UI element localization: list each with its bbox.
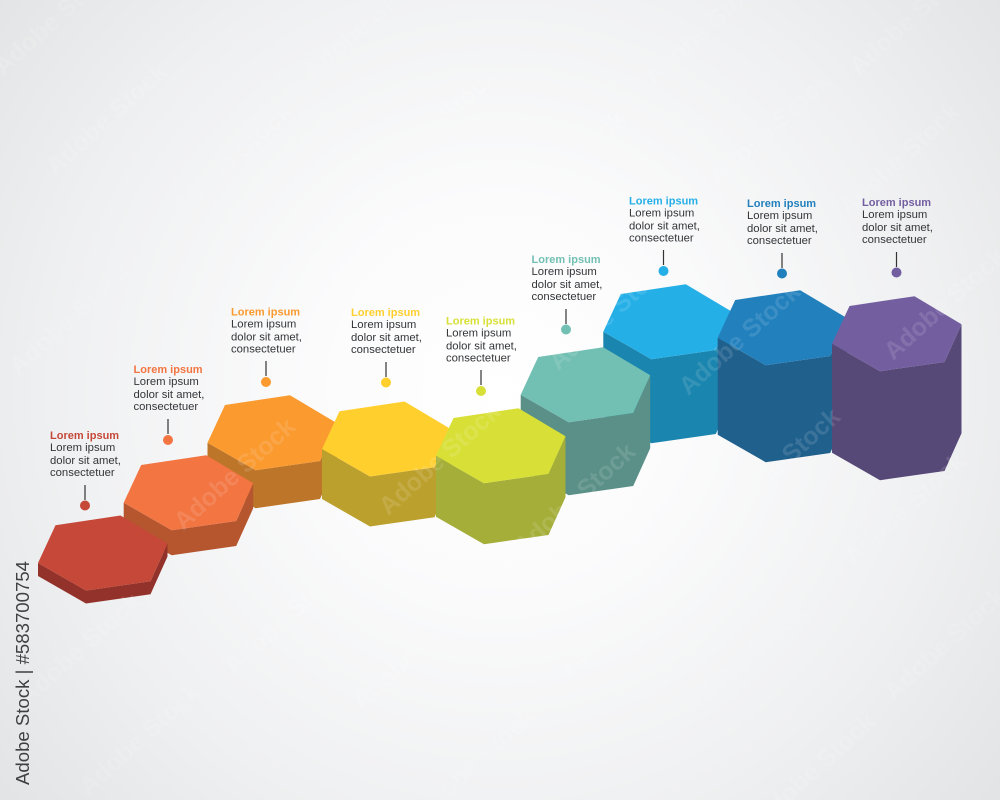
step 6: teal hexagon (521, 347, 650, 495)
label 3: dolor sit amet, (231, 332, 302, 344)
label 1 (50, 430, 121, 510)
label 2: Lorem ipsum (134, 364, 203, 376)
watermark pattern: Adobe Stock (14, 587, 146, 711)
label 4: dolor sit amet, (351, 332, 422, 344)
watermark pattern: Adobe Stock (169, 412, 301, 536)
step 8: dark blue hexagon (718, 290, 847, 462)
watermark pattern: Adobe Stock (41, 57, 173, 181)
step 9: purple hexagon (832, 296, 962, 480)
label 7: Lorem ipsum (629, 196, 698, 208)
label 6: Lorem ipsum (532, 254, 601, 266)
label 3 (231, 306, 302, 387)
label 7 (629, 196, 700, 276)
watermark pattern: Adobe Stock (509, 437, 641, 561)
step 3: amber hexagon (208, 395, 337, 508)
label 8: Lorem ipsum (747, 210, 812, 222)
label 2: consectetuer (134, 401, 198, 413)
label 5: Lorem ipsum (446, 316, 515, 328)
step 7: light blue hexagon (603, 284, 733, 443)
watermark pattern: Adobe Stock (839, 447, 971, 571)
watermark pattern: Adobe Stock (339, 262, 471, 386)
label 8 (747, 198, 818, 278)
label 8: Lorem ipsum (747, 198, 816, 210)
watermark pattern: Adobe Stock (714, 402, 846, 526)
label 1: Lorem ipsum (50, 442, 115, 454)
label 9 (862, 197, 933, 278)
label 5: consectetuer (446, 352, 511, 364)
watermark pattern: Adobe Stock (347, 592, 479, 716)
label 9: dolor sit amet, (862, 222, 933, 234)
label 7: dolor sit amet, (629, 220, 700, 232)
label 3: consectetuer (231, 344, 296, 356)
label 3: Lorem ipsum (231, 318, 296, 330)
watermark pattern: Adobe Stock (214, 217, 346, 341)
label 1: consectetuer (50, 467, 115, 479)
watermark pattern: Adobe Stock (674, 277, 806, 401)
label 6: Lorem ipsum (532, 266, 597, 278)
stock credit text: Adobe Stock | #583700754 (12, 561, 33, 785)
watermark pattern: Adobe Stock (544, 252, 676, 376)
label 6 (532, 254, 602, 334)
label 8: dolor sit amet, (747, 223, 818, 235)
label 9: Lorem ipsum (862, 197, 931, 209)
label 2 (134, 364, 204, 445)
label 4: Lorem ipsum (351, 307, 420, 319)
label 7: consectetuer (629, 232, 694, 244)
watermark pattern: Adobe Stock (679, 597, 811, 721)
label 6: dolor sit amet, (532, 279, 602, 291)
label 1: Lorem ipsum (50, 430, 119, 442)
label 8: consectetuer (747, 235, 812, 247)
watermark pattern: Adobe Stock (219, 557, 351, 681)
label 4: Lorem ipsum (351, 319, 416, 331)
watermark pattern: Adobe Stock (834, 97, 966, 221)
label 9: consectetuer (862, 234, 927, 246)
label 2: dolor sit amet, (134, 389, 204, 401)
label 6: consectetuer (532, 291, 596, 303)
watermark pattern: Adobe Stock (704, 67, 836, 191)
label 1: dolor sit amet, (50, 455, 121, 467)
label 5: dolor sit amet, (446, 340, 517, 352)
label 9: Lorem ipsum (862, 209, 927, 221)
label 5: Lorem ipsum (446, 328, 511, 340)
label 3: Lorem ipsum (231, 306, 300, 318)
step 5: lime hexagon (436, 408, 566, 544)
label 4 (351, 307, 422, 388)
watermark pattern: Adobe Stock (371, 62, 503, 186)
step 2: orange hexagon (124, 455, 253, 555)
label 5 (446, 316, 517, 396)
label 4: consectetuer (351, 344, 416, 356)
label 2: Lorem ipsum (134, 376, 199, 388)
watermark pattern: Adobe Stock (554, 557, 686, 681)
step 1: red hexagon (38, 516, 168, 604)
watermark pattern: Adobe Stock (374, 397, 506, 521)
watermark pattern: Adobe Stock (499, 104, 631, 228)
watermark pattern: Adobe Stock (4, 257, 136, 381)
watermark pattern: Adobe Stock (166, 97, 298, 221)
label 7: Lorem ipsum (629, 208, 694, 220)
watermark pattern: Adobe Stock (74, 677, 206, 800)
step 4: yellow hexagon (322, 402, 452, 526)
